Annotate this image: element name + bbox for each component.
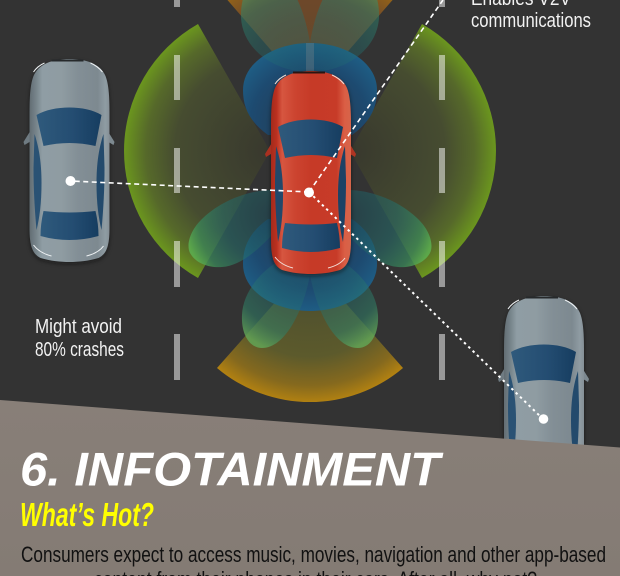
sensor lobes: rear side petals bbox=[189, 190, 431, 267]
subheading: what's hot: What’s Hot? bbox=[20, 496, 154, 533]
sensor field: rear orange sector bbox=[217, 263, 403, 402]
connection dots bbox=[66, 176, 548, 424]
sensor field: right side green sector bbox=[350, 24, 496, 278]
label: enables V2V communications: communications bbox=[471, 10, 591, 32]
gray car left bbox=[24, 59, 114, 264]
sensor field: front orange sector bbox=[217, 0, 403, 95]
sensor field: rear blue lobe bbox=[243, 219, 377, 311]
label: might avoid 80% crashes: Might avoid bbox=[35, 316, 122, 338]
panel: infotainment section background bbox=[0, 400, 620, 576]
sensor field: left side green sector bbox=[124, 24, 270, 278]
label: might avoid 80% crashes: 80% crashes bbox=[35, 339, 124, 361]
sensor field: front blue lobe bbox=[243, 43, 377, 135]
heading: 6. infotainment: 6. INFOTAINMENT bbox=[20, 442, 444, 496]
sensor lobes: rear petals bbox=[242, 250, 378, 348]
V2V connection lines bbox=[70, 0, 543, 419]
red car bbox=[265, 71, 356, 276]
gray car lower right bbox=[498, 296, 589, 501]
sensor lobes: front petals bbox=[241, 0, 379, 73]
road lane markings bbox=[174, 0, 445, 380]
